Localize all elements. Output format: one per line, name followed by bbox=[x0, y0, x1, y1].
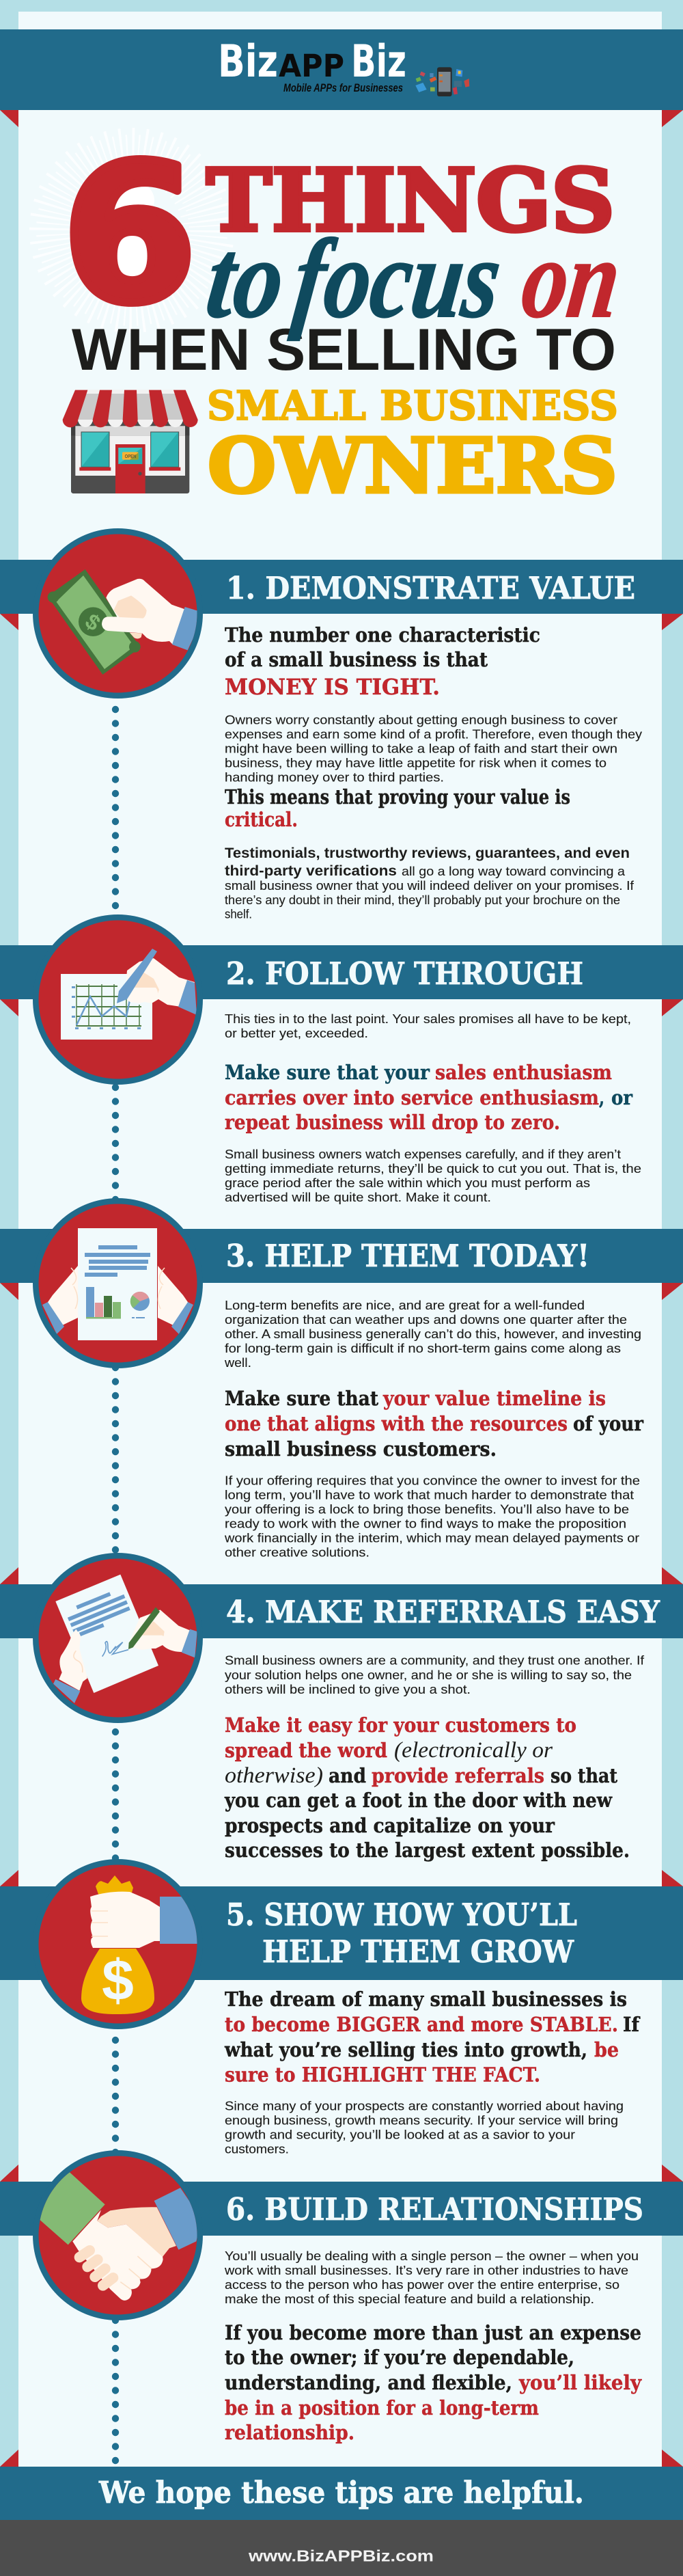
closing paragraph: all go a long way toward convincing a bbox=[402, 865, 626, 878]
logo: APP bbox=[279, 48, 344, 84]
emphasis statement: relationship. bbox=[225, 2421, 354, 2444]
emphasis statement: one that aligns with the resources bbox=[225, 1412, 568, 1435]
emphasis statement: provide referrals bbox=[372, 1764, 544, 1787]
to focus on bbox=[201, 216, 627, 341]
closing paragraph: getting immediate returns, they’ll be quick to cut you out. That is, the bbox=[225, 1162, 641, 1176]
emphasis statement bbox=[224, 1713, 630, 1862]
closing paragraph: Since many of your prospects are constantly worried about having bbox=[225, 2100, 624, 2113]
emphasis statement: sure to HIGHLIGHT THE FACT. bbox=[225, 2063, 540, 2086]
intro paragraph: Long-term benefits are nice, and are great for a well-funded bbox=[225, 1299, 585, 1312]
closing paragraph: there’s any doubt in their mind, they’ll probably put your brochure on the bbox=[225, 893, 620, 907]
closing paragraph: Testimonials, trustworthy reviews, guarantees, and even bbox=[225, 845, 630, 861]
intro paragraph: This ties in to the last point. Your sales promises all have to be kept, bbox=[225, 1012, 631, 1026]
intro paragraph: You’ll usually be dealing with a single person – the owner – when you bbox=[225, 2249, 639, 2263]
icon: hands holding report bbox=[33, 1198, 203, 1368]
logo: Biz bbox=[218, 36, 278, 87]
intro paragraph: access to the person who has power over the entire enterprise, so bbox=[225, 2278, 619, 2292]
intro paragraph: well. bbox=[224, 1356, 251, 1370]
emphasis statement: you can get a foot in the door with new bbox=[224, 1789, 613, 1812]
body paragraph: might have been willing to take a leap of faith and start their own bbox=[225, 742, 617, 756]
heading: 5. show how you'll help them grow: HELP THEM GROW bbox=[262, 1934, 574, 1970]
emphasis statement: what you’re selling ties into growth, bbox=[224, 2038, 587, 2061]
intro paragraph: your solution helps one owner, and he or she is willing to say so, the bbox=[225, 1668, 632, 1682]
section 5: show how you'll help them grow bbox=[33, 1859, 641, 2156]
intro paragraph bbox=[225, 1012, 631, 1040]
closing paragraph: other creative solutions. bbox=[225, 1546, 370, 1560]
intro paragraph: or better yet, exceeded. bbox=[225, 1027, 368, 1040]
body paragraph: Owners worry constantly about getting enough business to cover bbox=[225, 714, 617, 727]
icon: phone with apps bbox=[415, 67, 469, 96]
closing paragraph: customers. bbox=[225, 2142, 289, 2156]
closing paragraph: your offering is a lock to bring those benefits. You’ll also have to be bbox=[225, 1502, 629, 1516]
section 1: demonstrate value bbox=[33, 528, 642, 921]
section 4: make referrals easy bbox=[33, 1553, 660, 1862]
closing paragraph: grace period after the sale within which you must perform as bbox=[225, 1176, 590, 1190]
logo: Mobile APPs for Businesses bbox=[283, 81, 403, 94]
intro paragraph: organization that can weather ups and downs one quarter after the bbox=[225, 1313, 627, 1327]
icon: hand holding money bag bbox=[33, 1859, 203, 2029]
icon: storefront bbox=[63, 390, 198, 493]
closing paragraph: If your offering requires that you convince the owner to invest for the bbox=[225, 1474, 640, 1487]
closing paragraph: ready to work with the owner to find ways to make the proposition bbox=[225, 1517, 626, 1531]
closing paragraph: Small business owners watch expenses carefully, and if they aren’t bbox=[225, 1148, 621, 1161]
emphasis statement: spread the word bbox=[225, 1739, 387, 1762]
intro paragraph: other. A small business generally can’t do this, however, and investing bbox=[225, 1327, 641, 1341]
emphasis statement bbox=[225, 1387, 644, 1461]
section 6: build relationships bbox=[33, 2150, 643, 2444]
closing paragraph: enough business, growth means security. If your service will bring bbox=[225, 2113, 618, 2127]
SMALL BUSINESS: SMALL BUSINESS bbox=[207, 382, 618, 429]
heading: 3. help them today: 3. HELP THEM TODAY! bbox=[226, 1238, 589, 1274]
WHEN SELLING TO: WHEN SELLING TO bbox=[72, 317, 616, 383]
closing paragraph: long term, you’ll have to work that much harder to demonstrate that bbox=[225, 1489, 634, 1502]
closing paragraph bbox=[225, 845, 635, 921]
icon: hand giving money bbox=[33, 528, 203, 699]
sunburst rays bbox=[55, 154, 208, 307]
section 3: help them today bbox=[33, 1198, 644, 1560]
emphasis statement: Make sure that your bbox=[225, 1061, 430, 1084]
emphasis statement: This means that proving your value is bbox=[225, 785, 570, 809]
OWNERS: OWNERS bbox=[208, 422, 617, 510]
emphasis statement bbox=[225, 785, 570, 831]
logo: Biz bbox=[351, 36, 406, 87]
emphasis statement: you’ll likely bbox=[518, 2371, 642, 2394]
icon: signing a document bbox=[33, 1553, 203, 1723]
lead statement bbox=[225, 623, 540, 700]
to focus on: to bbox=[201, 216, 291, 341]
dotted connectors bbox=[112, 706, 119, 2464]
title bbox=[55, 124, 627, 510]
emphasis statement: and bbox=[329, 1764, 366, 1787]
closing paragraph: growth and security, you’ll be looked at as a savior to your bbox=[225, 2128, 575, 2142]
intro paragraph bbox=[224, 1299, 641, 1370]
closing banner text: We hope these tips are helpful. bbox=[98, 2476, 584, 2510]
emphasis statement: , bbox=[599, 1086, 604, 1109]
icon: hand drawing chart bbox=[33, 914, 203, 1085]
heading: 2. follow through: 2. FOLLOW THROUGH bbox=[226, 955, 583, 992]
closing paragraph: small business owner that you will indeed deliver on your promises. If bbox=[225, 879, 635, 893]
emphasis statement: carries over into service enthusiasm bbox=[225, 1086, 599, 1109]
section 2: follow through bbox=[33, 914, 641, 1204]
intro paragraph: for long-term gain is difficult if no short-term gains come along as bbox=[225, 1342, 621, 1355]
THINGS: THINGS bbox=[206, 151, 615, 251]
emphasis statement: Make sure that bbox=[225, 1387, 379, 1410]
emphasis statement: be bbox=[594, 2038, 619, 2061]
emphasis statement: prospects and capitalize on your bbox=[225, 1814, 555, 1837]
emphasis statement: or bbox=[611, 1086, 633, 1109]
icon: handshake bbox=[33, 2150, 203, 2320]
intro paragraph: others will be inclined to give you a shot. bbox=[225, 1683, 471, 1696]
white counters of the numeral bbox=[113, 235, 150, 279]
emphasis statement: otherwise) bbox=[225, 1763, 323, 1788]
emphasis statement: successes to the largest extent possible. bbox=[225, 1839, 630, 1862]
emphasis statement: (electronically or bbox=[394, 1738, 553, 1763]
closing paragraph bbox=[225, 1148, 641, 1204]
icon: hand giving money: $ bbox=[81, 608, 105, 636]
closing paragraph: work financially in the interim, which may mean delayed payments or bbox=[224, 1531, 639, 1545]
closing paragraph bbox=[224, 1474, 640, 1560]
closing paragraph: advertised will be quite short. Make it count. bbox=[225, 1191, 491, 1204]
to focus on: focus bbox=[288, 216, 507, 341]
footer bar bbox=[0, 2520, 683, 2576]
heading: 5. show how you'll help them grow bbox=[226, 1897, 577, 1970]
emphasis statement: to become BIGGER and more STABLE. bbox=[225, 2013, 618, 2036]
logo bbox=[218, 36, 406, 94]
emphasis statement: If bbox=[623, 2013, 641, 2036]
emphasis statement: small business customers. bbox=[225, 1437, 497, 1461]
closing paragraph: third-party verifications bbox=[225, 863, 397, 879]
closing paragraph: shelf. bbox=[225, 908, 252, 921]
lead statement: MONEY IS TIGHT. bbox=[225, 674, 440, 700]
lead statement: The number one characteristic bbox=[225, 623, 540, 647]
heading: 5. show how you'll help them grow: 5. SHOW HOW YOU’LL bbox=[226, 1897, 577, 1933]
emphasis statement: critical. bbox=[225, 808, 298, 831]
emphasis statement: of your bbox=[573, 1412, 644, 1435]
emphasis statement: so that bbox=[550, 1764, 618, 1787]
to focus on: on bbox=[516, 216, 627, 341]
lead statement: of a small business is that bbox=[225, 648, 488, 671]
intro paragraph: make the most of this special feature and build a relationship. bbox=[225, 2292, 594, 2306]
emphasis statement: Make it easy for your customers to bbox=[225, 1713, 576, 1737]
emphasis statement: repeat business will drop to zero. bbox=[225, 1111, 560, 1134]
intro paragraph bbox=[225, 1654, 645, 1696]
emphasis statement: The dream of many small businesses is bbox=[225, 1988, 627, 2011]
emphasis statement bbox=[224, 1988, 641, 2086]
emphasis statement: your value timeline is bbox=[382, 1387, 606, 1410]
intro paragraph bbox=[224, 2249, 639, 2306]
footer url: www.BizAPPBiz.com bbox=[248, 2547, 434, 2564]
emphasis statement: to the owner; if you’re dependable, bbox=[225, 2346, 574, 2369]
intro paragraph: work with small businesses. It’s very rare in other industries to have bbox=[224, 2264, 628, 2277]
emphasis statement: be in a position for a long-term bbox=[225, 2396, 539, 2419]
body paragraph: handing money over to third parties. bbox=[225, 771, 444, 785]
body paragraph: expenses and earn some kind of a profit. Therefore, even though they bbox=[225, 727, 642, 741]
emphasis statement: understanding, and flexible, bbox=[225, 2371, 512, 2394]
emphasis statement bbox=[225, 2321, 642, 2444]
intro paragraph: Small business owners are a community, and they trust one another. If bbox=[225, 1654, 645, 1668]
emphasis statement: sales enthusiasm bbox=[435, 1061, 612, 1084]
body paragraph: business, they may have little appetite for risk when it comes to bbox=[225, 756, 607, 770]
numeral 6: 6 bbox=[62, 124, 197, 345]
heading: 1. demonstrate value: 1. DEMONSTRATE VALUE bbox=[226, 570, 635, 606]
icon: storefront: OPEN bbox=[125, 455, 136, 459]
emphasis statement bbox=[225, 1061, 633, 1134]
closing paragraph bbox=[225, 2100, 624, 2156]
emphasis statement: If you become more than just an expense bbox=[225, 2321, 641, 2344]
icon: hand holding money bag: $ bbox=[102, 1948, 134, 2012]
heading: 6. build relationships: 6. BUILD RELATIONSHIPS bbox=[226, 2191, 643, 2227]
body paragraph bbox=[225, 714, 642, 785]
